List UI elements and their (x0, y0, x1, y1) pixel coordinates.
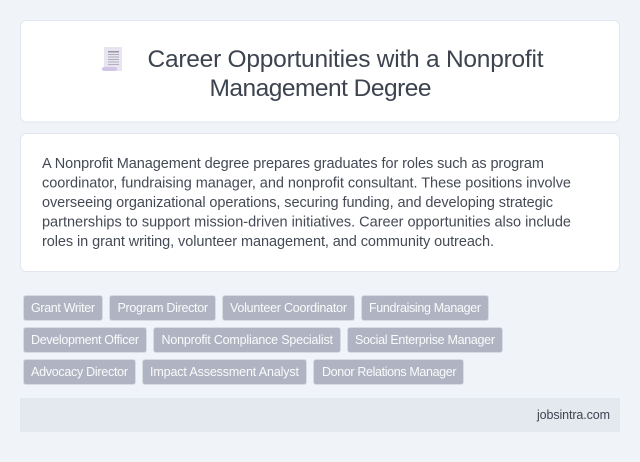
tag list (24, 296, 502, 384)
footer source text: jobsintra.com (536, 408, 610, 422)
description text: partnerships to support mission-driven initiatives. Career opportunities also include (42, 214, 571, 230)
icon: document scroll (102, 47, 122, 71)
tag: Advocacy Director: Advocacy Director (31, 365, 128, 379)
tag: Social Enterprise Manager (348, 328, 502, 352)
tag: Social Enterprise Manager: Social Enterprise Manager (355, 333, 495, 347)
tag: Volunteer Coordinator (222, 296, 354, 320)
tag: Impact Assessment Analyst: Impact Assessment Analyst (150, 365, 300, 379)
description text: A Nonprofit Management degree prepares graduates for roles such as program (42, 156, 544, 172)
footer bar (20, 398, 620, 432)
panel: description (20, 134, 620, 272)
tag: Advocacy Director (24, 360, 136, 384)
description text: coordinator, fundraising manager, and nonprofit consultant. These positions involve (42, 176, 571, 192)
panel: header (20, 20, 620, 122)
tag: Program Director (110, 296, 216, 320)
title (148, 46, 544, 102)
tag: Development Officer (24, 328, 146, 352)
description text: roles in grant writing, volunteer management, and community outreach. (42, 234, 494, 250)
tag: Impact Assessment Analyst (142, 360, 306, 384)
tag: Fundraising Manager: Fundraising Manager (369, 301, 481, 315)
tag: Volunteer Coordinator: Volunteer Coordinator (230, 301, 347, 315)
tag: Nonprofit Compliance Specialist: Nonprofit Compliance Specialist (162, 333, 334, 347)
tag: Fundraising Manager (362, 296, 488, 320)
tag: Program Director: Program Director (118, 301, 208, 315)
tag: Grant Writer (24, 296, 102, 320)
description text: overseeing organizational operations, securing funding, and developing strategic (42, 195, 553, 211)
tag: Donor Relations Manager: Donor Relations Manager (322, 365, 456, 379)
tag: Donor Relations Manager (314, 360, 464, 384)
tag: Development Officer: Development Officer (31, 333, 139, 347)
tag: Nonprofit Compliance Specialist (154, 328, 340, 352)
title: Career Opportunities with a Nonprofit (148, 46, 544, 73)
title: Management Degree (210, 75, 432, 102)
tag: Grant Writer: Grant Writer (31, 301, 95, 315)
description text (42, 156, 571, 250)
